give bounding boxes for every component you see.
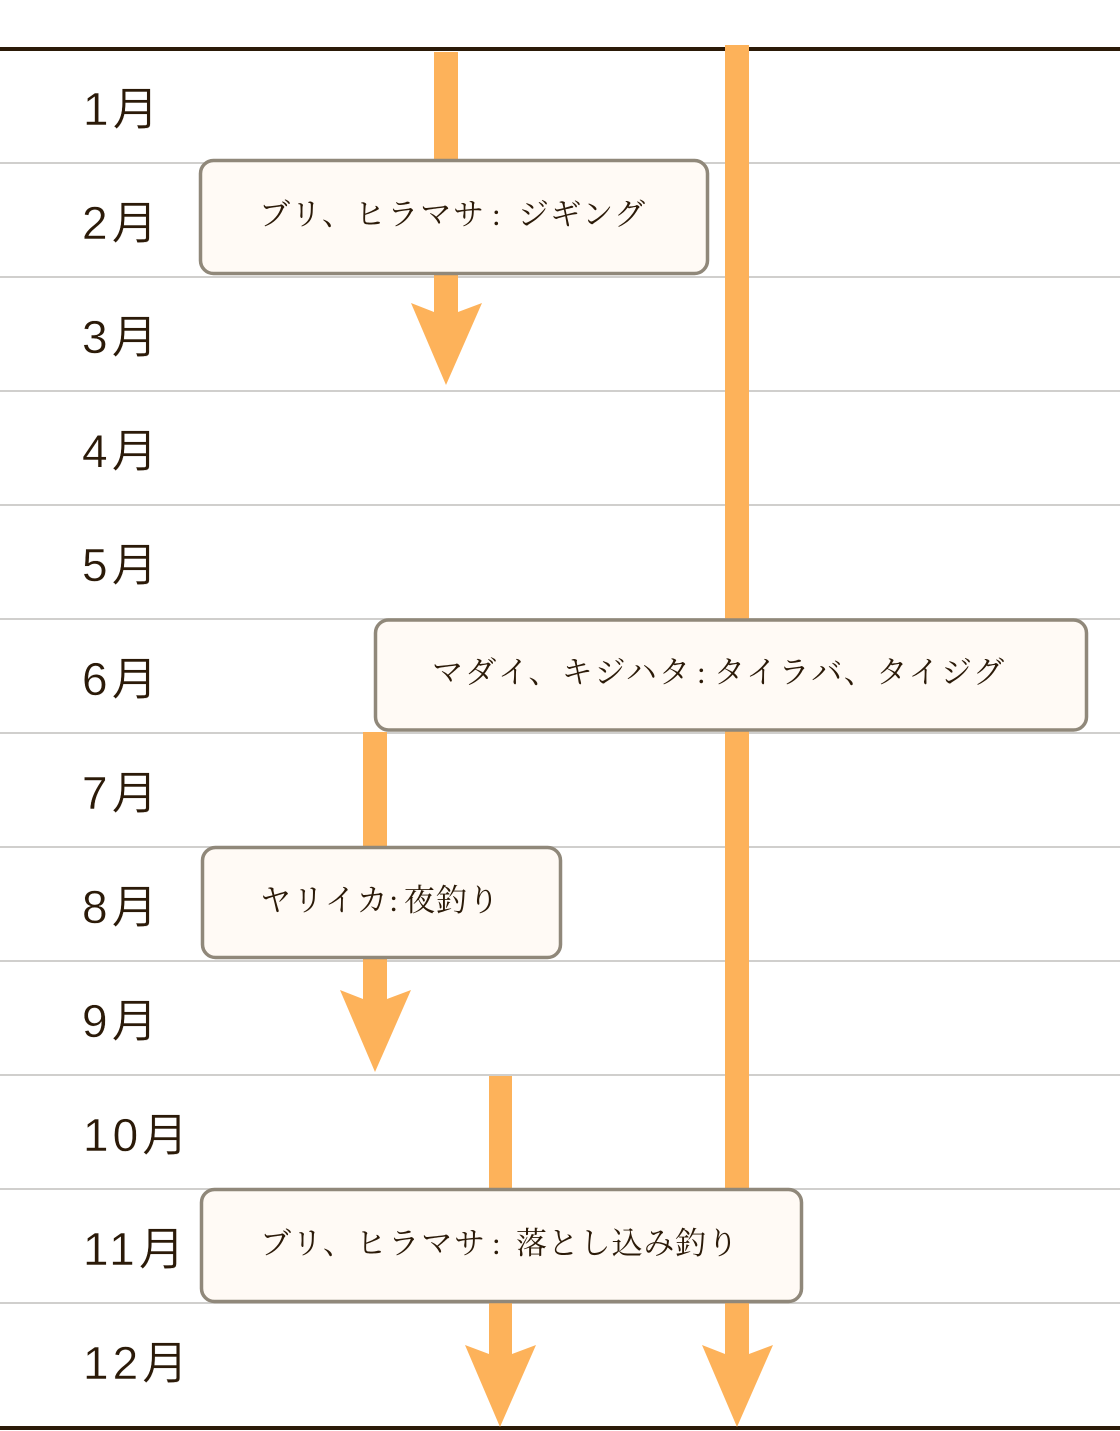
month: February: 2月 <box>82 197 162 249</box>
arrow: October to December <box>465 1076 536 1427</box>
callout: buri jigging <box>200 160 708 274</box>
callout: buri drop-in fishing: : <box>492 1226 501 1261</box>
month: December: 12月 <box>83 1337 192 1389</box>
month: May: 5月 <box>82 539 162 591</box>
callout: madai tairaba <box>376 620 1086 730</box>
callout: buri drop-in fishing: ブリ、ヒラマサ <box>260 1226 485 1261</box>
callout: madai tairaba: : <box>697 655 706 690</box>
callout: buri jigging: ジギング <box>518 197 645 232</box>
arrow: July to September <box>340 732 411 1072</box>
month: July: 7月 <box>82 767 162 819</box>
month: June: 6月 <box>82 653 162 705</box>
callout: buri jigging: : <box>492 197 501 232</box>
month: January: 1月 <box>83 83 163 135</box>
callout: squid night fishing: 夜釣り <box>404 883 499 918</box>
month: March: 3月 <box>82 311 162 363</box>
month labels <box>82 83 192 1389</box>
month: August: 8月 <box>82 881 162 933</box>
month: September: 9月 <box>82 995 162 1047</box>
arrow: January to March <box>411 52 482 385</box>
callout: squid night fishing: ヤリイカ: <box>260 883 398 918</box>
callout: buri drop-in fishing: 落とし込み釣り <box>516 1226 738 1261</box>
arrow: January to December <box>702 45 773 1427</box>
month: April: 4月 <box>82 425 162 477</box>
callout: buri drop-in fishing <box>202 1190 802 1302</box>
callout: squid night fishing <box>202 848 560 958</box>
month: October: 10月 <box>83 1109 192 1161</box>
month: November: 11月 <box>83 1223 189 1275</box>
callout: madai tairaba: マダイ、キジハタ <box>432 655 690 690</box>
callout: buri jigging: ブリ、ヒラマサ <box>259 197 484 232</box>
callout: madai tairaba: タイラバ、タイジグ <box>714 655 1004 690</box>
